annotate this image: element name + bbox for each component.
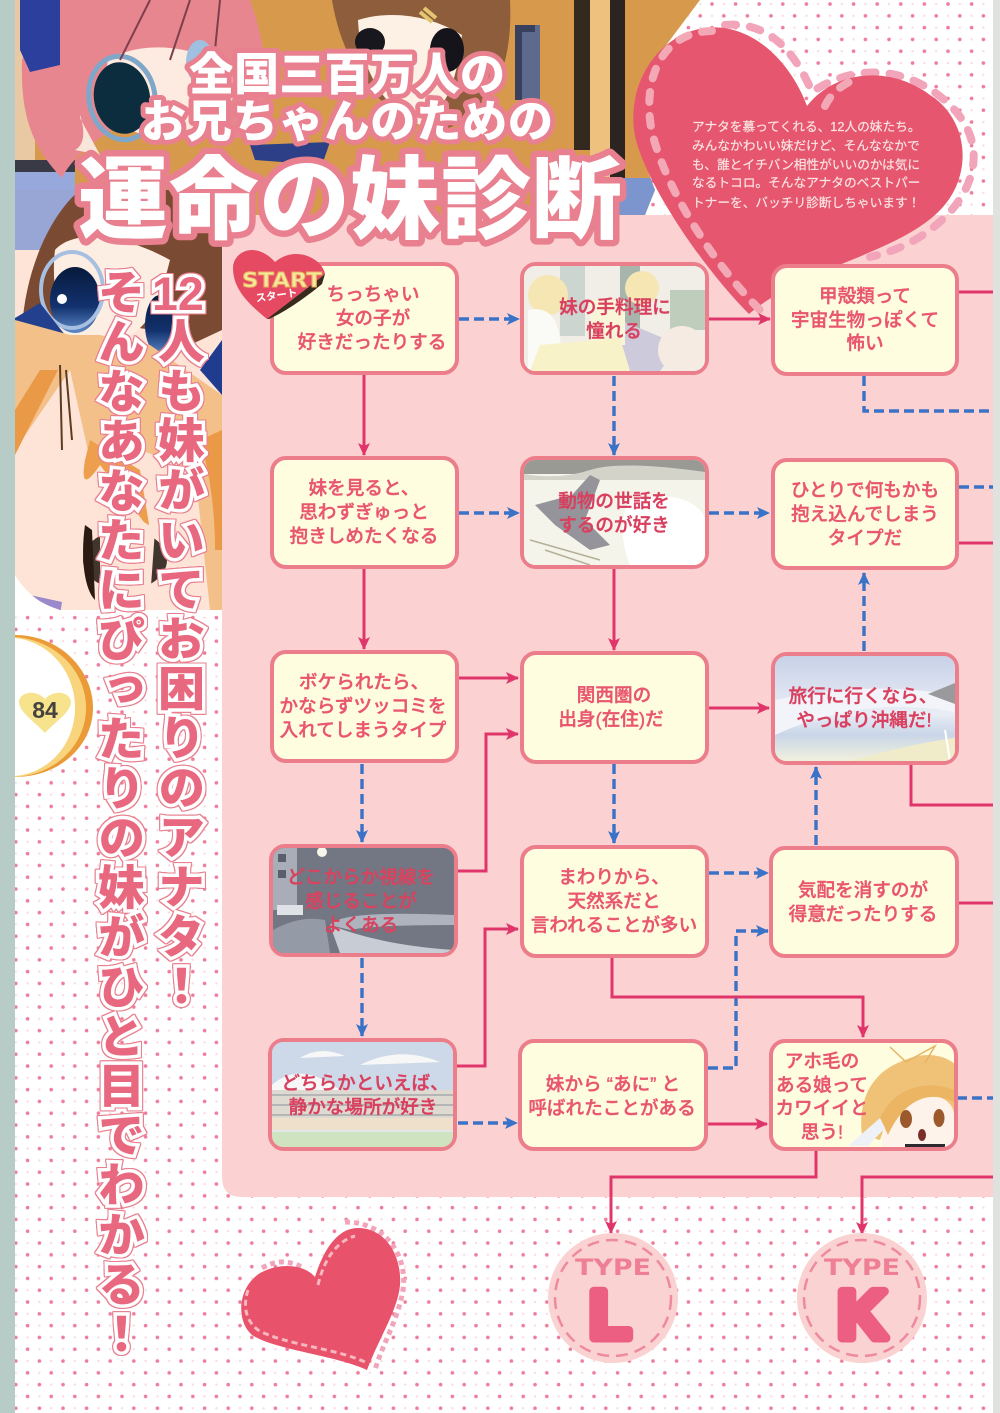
brown hair girl (332, 0, 510, 130)
node: home cooking with photo (522, 264, 707, 374)
title: お兄ちゃんのための (141, 96, 553, 147)
node: animal care with photo: するのが好き (558, 514, 670, 536)
illustration: top girls banner (15, 0, 705, 215)
node: crustaceans: 宇宙生物っぽくて (791, 310, 939, 330)
node: kansai: 関西圏の (577, 684, 651, 706)
node: small girls love: 好きだったりする (298, 332, 446, 352)
badge: type L (548, 1233, 678, 1363)
flow arrows: solid red (YES) (364, 292, 993, 1234)
node: tsukkomi: かならずツッコミを (280, 696, 446, 716)
node: natural type: まわりから、 (558, 866, 670, 888)
node: hug sister: 妹を見ると、 (309, 478, 419, 498)
badge: type K (797, 1233, 927, 1363)
pink hair girl (22, 0, 267, 178)
intro text: トナーを、バッチリ診断しちゃいます！ (692, 195, 920, 210)
node: hug sister (272, 458, 457, 567)
node: quiet places with photo: どちらかといえば、 (281, 1072, 449, 1094)
node: quiet places with photo: 静かな場所が好き (289, 1096, 437, 1118)
node: feeling watched with photo: よくある (324, 914, 398, 936)
panel: flowchart background (222, 215, 993, 1197)
node: okinawa with photo: 旅行に行くなら、 (789, 686, 937, 706)
node: quiet places with photo (270, 1040, 455, 1149)
node: natural type (522, 847, 707, 956)
intro text: なるトコロ。そんなアナタのベストパー (692, 176, 920, 190)
decoration: bottom heart (241, 1222, 404, 1370)
intro text: アナタを慕ってくれる、12人の妹たち。 (692, 120, 921, 134)
badge: type K: TYPE (824, 1256, 900, 1281)
node: animal care with photo (522, 458, 707, 567)
node: takes on everything (773, 460, 957, 568)
flow arrows: dashed blue (NO) (362, 319, 993, 1123)
intro text: みんなかわいい妹だけど、そんななかで (692, 139, 920, 153)
node: hide presence: 得意だったりする (789, 904, 937, 924)
node: takes on everything: タイプだ (828, 528, 902, 548)
node: crustaceans: 怖い (846, 332, 884, 354)
node: hug sister: 思わずぎゅっと (299, 502, 429, 522)
start heart: スタート (255, 287, 298, 305)
node: ahoge with girl: ある娘って (776, 1074, 868, 1096)
badge: type L: L (589, 1277, 631, 1353)
node: natural type: 天然系だと (568, 890, 660, 912)
intro text: も、誰とイチバン相性がいいのかは気に (692, 157, 920, 172)
title: 全国三百万人の (189, 49, 505, 100)
node: kansai (522, 653, 707, 762)
page number tab: 84 (32, 697, 58, 723)
node: hide presence: 気配を消すのが (798, 880, 928, 900)
node: tsukkomi: 入れてしまうタイプ (280, 720, 447, 740)
badge: type L: TYPE (575, 1256, 651, 1281)
badge: type K: K (837, 1277, 887, 1353)
node: hug sister: 抱きしめたくなる (290, 526, 438, 546)
node: feeling watched with photo: 感じることが (305, 890, 417, 912)
node: small girls love (272, 264, 457, 373)
node: crustaceans (773, 266, 957, 374)
intro text (692, 120, 921, 210)
slogan: left vertical column: そんなあなたにぴったりの妹がひと目でわかる！ (91, 268, 144, 1359)
node: okinawa with photo (773, 654, 957, 763)
node: called ani (520, 1041, 706, 1149)
node: kansai: 出身(在住)だ (558, 708, 664, 730)
start heart (233, 250, 325, 319)
decoration: large heart (633, 25, 974, 314)
illustration: left girl (15, 190, 225, 615)
node: ahoge with girl: 思う! (801, 1122, 843, 1142)
page number tab (15, 635, 93, 777)
node: tsukkomi (272, 652, 457, 761)
node: small girls love: 女の子が (336, 308, 411, 328)
node: small girls love: ちっちゃい (327, 284, 419, 304)
node: hide presence (771, 848, 957, 956)
white edge patch under left art (15, 575, 60, 612)
title: 運命の妹診断 (78, 151, 622, 251)
node: feeling watched with photo: どこからか視線を (287, 866, 435, 888)
node: takes on everything: 抱え込んでしまう (791, 504, 939, 524)
title (78, 49, 622, 251)
node: takes on everything: ひとりで何もかも (791, 480, 939, 500)
icon: yellow heart (19, 693, 71, 733)
node: ahoge with girl: カワイイと (776, 1098, 868, 1118)
node: called ani: 呼ばれたことがある (528, 1098, 696, 1118)
node: tsukkomi: ボケられたら、 (299, 672, 429, 692)
node: natural type: 言われることが多い (531, 914, 697, 936)
node: feeling watched with photo (271, 846, 456, 955)
node: crustaceans: 甲殻類って (819, 286, 911, 306)
node: okinawa with photo: やっぱり沖縄だ! (796, 710, 932, 730)
slogan: right vertical column: 12 人も妹がいてお困りのアナタ！ (151, 270, 204, 1011)
node: ahoge with girl (771, 1041, 956, 1149)
node: home cooking with photo: 憧れる (586, 320, 642, 342)
start heart: START (242, 268, 322, 292)
node: home cooking with photo: 妹の手料理に (559, 296, 671, 318)
node: animal care with photo: 動物の世話を (558, 490, 670, 512)
node: ahoge with girl: アホ毛の (785, 1050, 859, 1072)
node: called ani: 妹から “あに” と (546, 1074, 680, 1094)
